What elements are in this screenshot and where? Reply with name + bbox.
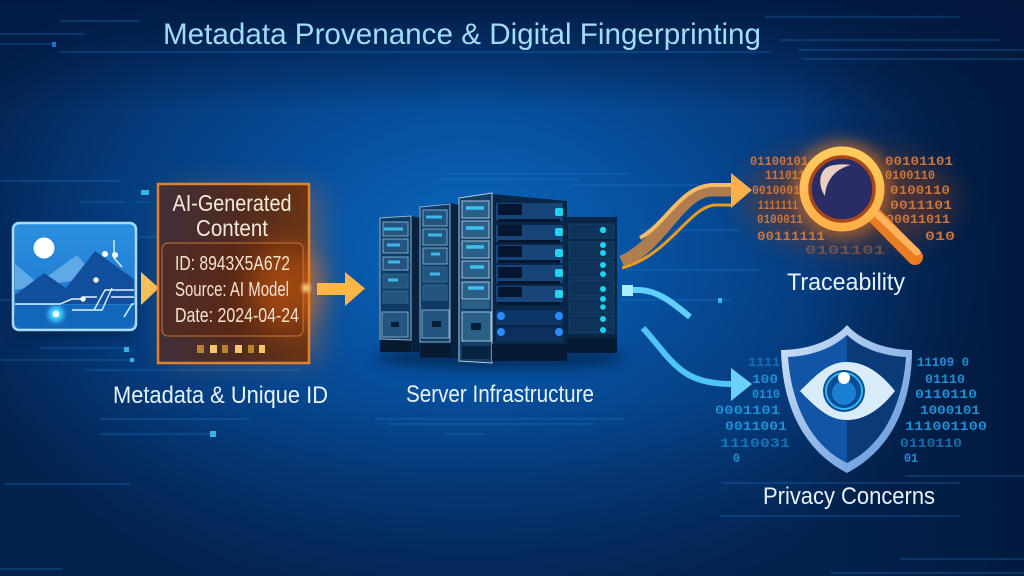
binary field: traceability: 1111111: [758, 198, 798, 213]
binary field: traceability: 00101101: [885, 154, 953, 169]
binary field: privacy: 0: [733, 451, 740, 466]
binary field: privacy: 111001100: [905, 419, 987, 434]
connector port: [622, 285, 633, 296]
metadata heading line 2: Content: [196, 215, 269, 241]
binary field: traceability: 111011: [765, 168, 805, 183]
binary field: privacy: 0110110: [915, 387, 977, 402]
binary field: traceability: 0100011: [757, 212, 803, 227]
rack 4: [565, 217, 617, 353]
arrow: into metadata box: [141, 272, 159, 305]
binary field: traceability: 0100110: [885, 168, 935, 183]
label: traceability: Traceability: [787, 269, 905, 296]
metadata fields: Source: AI Model: [175, 279, 289, 301]
binary field: privacy: 100: [752, 372, 778, 387]
binary field: privacy: 0011001: [725, 419, 787, 434]
arrow: to traceability: [622, 173, 752, 268]
metadata fields: Date: 2024-04-24: [175, 305, 299, 327]
metadata fields: [175, 253, 299, 327]
image card icon: [13, 223, 136, 337]
binary field: traceability: 010: [925, 229, 955, 244]
binary field: privacy: 1000101: [920, 403, 980, 418]
binary field: privacy: 0110: [752, 387, 780, 402]
binary field: privacy: [715, 355, 987, 466]
arrow: to servers: [317, 272, 365, 306]
label: privacy: Privacy Concerns: [763, 483, 935, 510]
label: servers: Server Infrastructure: [406, 381, 594, 408]
binary field: privacy: 1111: [748, 355, 780, 370]
metadata heading: AI-Generated: [172, 190, 292, 216]
rack 3: [459, 193, 567, 363]
rack 2: [420, 203, 460, 358]
rack 1: [380, 216, 421, 352]
icon: privacy shield: [781, 325, 912, 473]
binary field: privacy: 11109 0: [917, 355, 969, 370]
title: Metadata Provenance & Digital Fingerprinting: [163, 18, 761, 51]
binary field: traceability: 0100110: [890, 183, 950, 198]
binary field: privacy: 0001101: [715, 403, 780, 418]
server racks: [375, 193, 625, 370]
label: metadata: Metadata & Unique ID: [113, 382, 328, 409]
binary field: traceability: [745, 150, 955, 258]
binary field: traceability: 0011101: [890, 198, 952, 213]
icon: magnifying glass: [792, 139, 917, 257]
binary field: traceability: 0101101: [805, 243, 885, 258]
binary field: traceability: 0010001: [752, 183, 800, 198]
status pixels: [197, 345, 265, 353]
binary field: privacy: 01: [904, 451, 918, 466]
metadata fields: ID: 8943X5A672: [175, 253, 290, 275]
arrow: bright connector: [622, 290, 690, 317]
binary field: traceability: 00011011: [886, 212, 950, 227]
binary field: privacy: 01110: [925, 372, 965, 387]
arrow: to privacy: [643, 328, 752, 401]
panel: metadata card: [158, 184, 321, 363]
binary field: privacy: 0110110: [900, 436, 962, 451]
binary field: privacy: 1110031: [720, 436, 790, 451]
binary field: traceability: 01100101: [750, 154, 808, 169]
binary field: traceability: 00111111: [757, 229, 825, 244]
